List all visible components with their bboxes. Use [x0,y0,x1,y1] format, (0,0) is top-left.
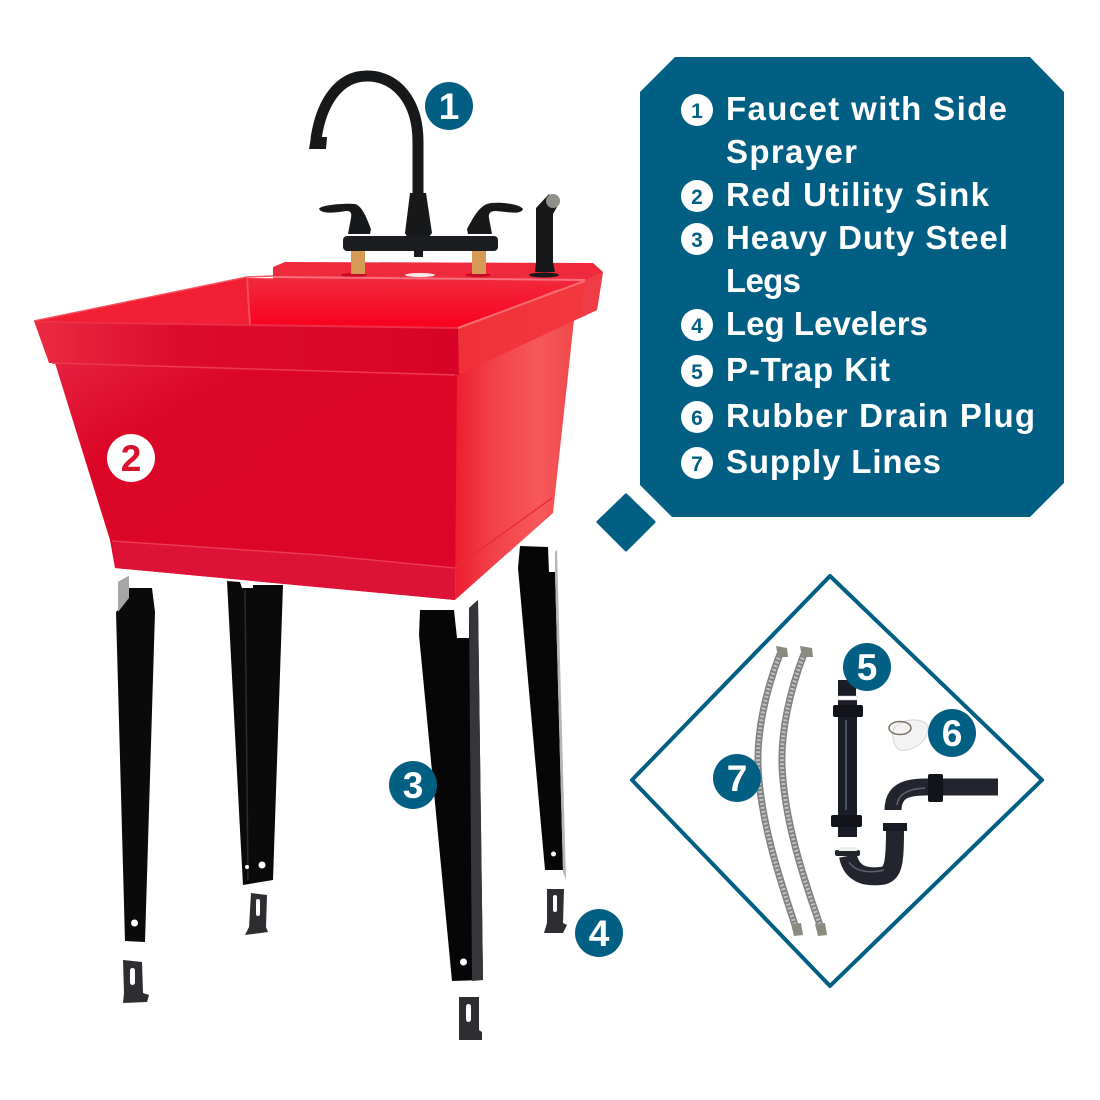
side sprayer [535,194,557,272]
item 6: 6 [691,407,703,430]
badge 7 [713,754,761,802]
item 6: Rubber Drain Plug [726,397,1035,434]
tailpiece [838,680,857,837]
leg back right [518,546,563,870]
badge 4 [575,909,623,957]
item 3 [681,219,1008,299]
item 1: Sprayer [726,133,857,170]
spout [316,76,418,200]
item 5: 5 [691,361,703,384]
item 7: 7 [691,453,703,476]
heavy duty steel legs [116,546,566,981]
badge 6 [928,709,976,757]
badge 5 [843,643,891,691]
item 5: P-Trap Kit [726,351,890,388]
supply lines [758,646,827,936]
item 4: 4 [691,315,703,338]
panel background [640,57,1064,517]
diamond outline around accessories [632,576,1042,986]
badge 7: 7 [727,758,747,799]
leg back left [227,581,283,885]
small decorative diamond [598,495,654,550]
side rim [456,281,585,376]
elbow [893,787,998,810]
badge 3 [389,761,437,809]
item 1 [681,90,1007,170]
handles [319,204,371,234]
leg levelers [123,889,567,1040]
rubber drain plug [889,720,928,750]
trap bend [848,830,895,876]
P-trap kit [831,680,998,876]
badge 3: 3 [403,765,423,806]
tub body side [455,320,574,600]
deck plate [343,236,498,251]
badge 1 [425,82,473,130]
item 7: Supply Lines [726,443,941,480]
front rim [34,321,459,375]
deck holes [341,273,367,277]
badge 1: 1 [439,86,459,127]
tub interior back wall [247,278,578,328]
item 2: 2 [691,186,703,209]
leg front right [419,600,483,981]
faucet with side sprayer [309,76,560,278]
item 4: Leg Levelers [726,305,928,342]
badge 2: 2 [121,438,141,479]
badge 6: 6 [942,713,962,754]
bottom lip [112,541,455,600]
badge 5: 5 [857,647,877,688]
item 3: 3 [691,229,703,252]
item 3: Heavy Duty Steel [726,219,1008,256]
item 1: Faucet with Side [726,90,1007,127]
panel: parts list [640,57,1064,517]
spout base [405,193,432,238]
sink: red utility tub [34,262,603,600]
rear deck [273,262,603,318]
item 3: Legs [726,262,801,299]
tub interior left wall [34,277,250,325]
badge 4: 4 [589,913,610,954]
tub body front [55,363,458,600]
item 2: Red Utility Sink [726,176,990,213]
item 1: 1 [691,100,703,123]
badge 2 [107,434,155,482]
leg front left [116,576,155,942]
brass stems [351,250,486,274]
